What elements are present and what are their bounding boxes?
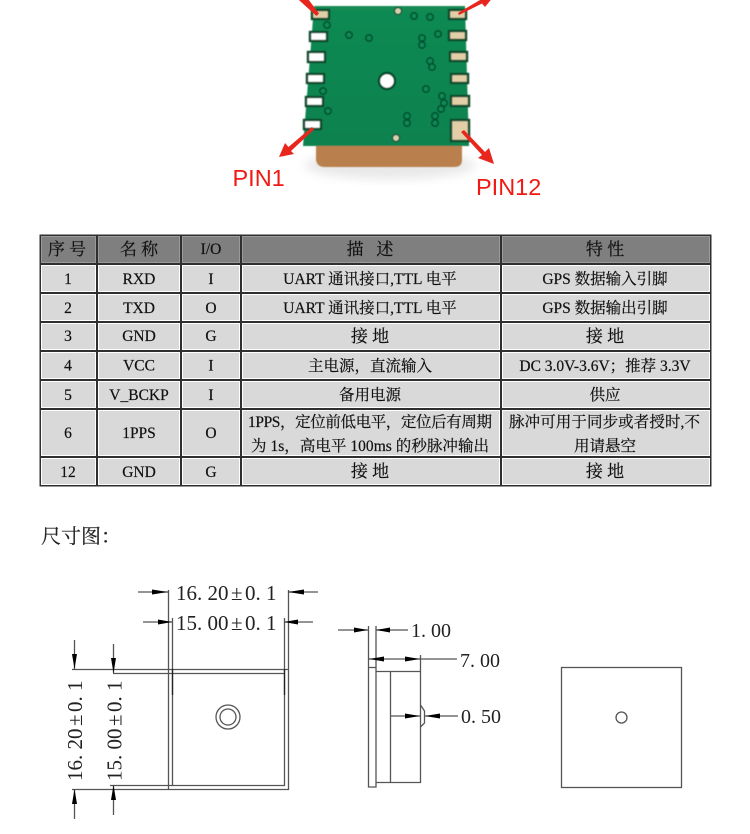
label: PIN1: PIN1: [232, 165, 285, 191]
row 5 text: V_BCKP: [109, 387, 169, 404]
row 6 text: 1PPS: [122, 425, 156, 442]
row 4 text: I: [208, 358, 214, 374]
row 12 text: 接 地: [351, 462, 389, 481]
dimension lines: [338, 630, 458, 716]
drawing: side view with dimensions: [338, 620, 501, 787]
row 6 text: 1PPS，定位前低电平，定位后有周期: [248, 413, 492, 431]
row 3 text: 3: [64, 328, 72, 345]
label 1.00: 1. 00: [411, 620, 451, 642]
drawing: bottom view: [562, 668, 682, 788]
table body cells: [42, 266, 710, 484]
arrow: PIN1: [279, 127, 314, 157]
row 1 text: 1: [64, 271, 72, 288]
width label 16.20: 16. 20±0. 1: [176, 581, 277, 605]
outer and inner outlines: [72, 590, 288, 790]
row 4 text: DC 3.0V-3.6V；推荐 3.3V: [519, 356, 691, 375]
label: PIN12: PIN12: [476, 174, 541, 200]
row 2 text: 2: [64, 300, 72, 317]
arrow: top left: [294, 0, 319, 16]
row 5 text: 供应: [589, 386, 621, 404]
height label 15.00: 15. 00±0. 1: [102, 680, 126, 781]
table header row: 名 称: [120, 240, 159, 259]
right solder pads: [449, 10, 469, 141]
table header row: 描 述: [347, 240, 393, 259]
antenna body: [316, 145, 462, 167]
row 2 text: GPS 数据输出引脚: [542, 299, 668, 317]
row 1 text: UART 通讯接口,TTL 电平: [283, 270, 457, 288]
table header row: I/O: [201, 241, 221, 258]
row 3 text: 接 地: [586, 327, 624, 346]
row 3 text: G: [205, 328, 217, 345]
row 1 text: GPS 数据输入引脚: [542, 270, 668, 288]
row 3 text: GND: [122, 328, 156, 345]
row 12 text: G: [205, 464, 217, 481]
pin definition table: [40, 234, 712, 486]
row 12 text: 接 地: [586, 462, 624, 481]
dimension arrows: [74, 592, 318, 819]
row 6 text: [64, 413, 700, 455]
row 4 text: [64, 356, 691, 375]
table header row: 特 性: [586, 240, 624, 259]
drawing: top view with dimensions: [63, 581, 318, 819]
row 12 text: 12: [60, 464, 76, 481]
row 12 text: GND: [122, 464, 156, 481]
row 2 text: [64, 299, 668, 317]
row 1 text: [64, 270, 668, 288]
row 5 text: [64, 386, 621, 404]
table header row: [42, 236, 710, 262]
arrow: PIN12: [461, 130, 494, 164]
heading: dimension drawing: 尺寸图：: [41, 525, 121, 548]
row 6 text: 6: [64, 425, 72, 442]
row 5 text: I: [208, 387, 214, 404]
label 0.50: 0. 50: [461, 706, 501, 728]
row 5 text: 5: [64, 387, 72, 404]
row 6 text: 为 1s，高电平 100ms 的秒脉冲输出: [251, 436, 489, 455]
mounting holes: [394, 8, 402, 14]
row 6 text: O: [205, 425, 217, 442]
row 5 text: 备用电源: [339, 386, 401, 404]
row 1 text: RXD: [123, 271, 155, 288]
row 3 text: [64, 327, 624, 346]
table header row: 序 号: [48, 240, 86, 259]
row 4 text: VCC: [123, 358, 155, 374]
row 12 text: [60, 462, 624, 481]
height label 16.20: 16. 20±0. 1: [63, 680, 87, 781]
side profile outline: [368, 626, 424, 787]
row 2 text: UART 通讯接口,TTL 电平: [283, 299, 457, 317]
label 7.00: 7. 00: [460, 650, 500, 672]
row 6 text: 用请悬空: [574, 437, 636, 455]
row 1 text: I: [208, 271, 214, 288]
arrow: top right: [458, 0, 494, 15]
row 2 text: O: [205, 300, 217, 317]
width label 15.00: 15. 00±0. 1: [176, 611, 277, 635]
photo: GPS module underside: [232, 0, 541, 200]
green circuit board: [303, 6, 469, 146]
row 6 text: 脉冲可用于同步或者授时,不: [509, 413, 700, 431]
row 3 text: 接 地: [351, 327, 389, 346]
row 2 text: TXD: [123, 300, 155, 317]
centre hole: [216, 705, 240, 729]
left solder pads: [304, 10, 329, 129]
board vias: [320, 13, 447, 126]
row 4 text: 4: [64, 358, 72, 374]
row 4 text: 主电源，直流输入: [308, 357, 432, 375]
centre hole: [379, 73, 395, 89]
